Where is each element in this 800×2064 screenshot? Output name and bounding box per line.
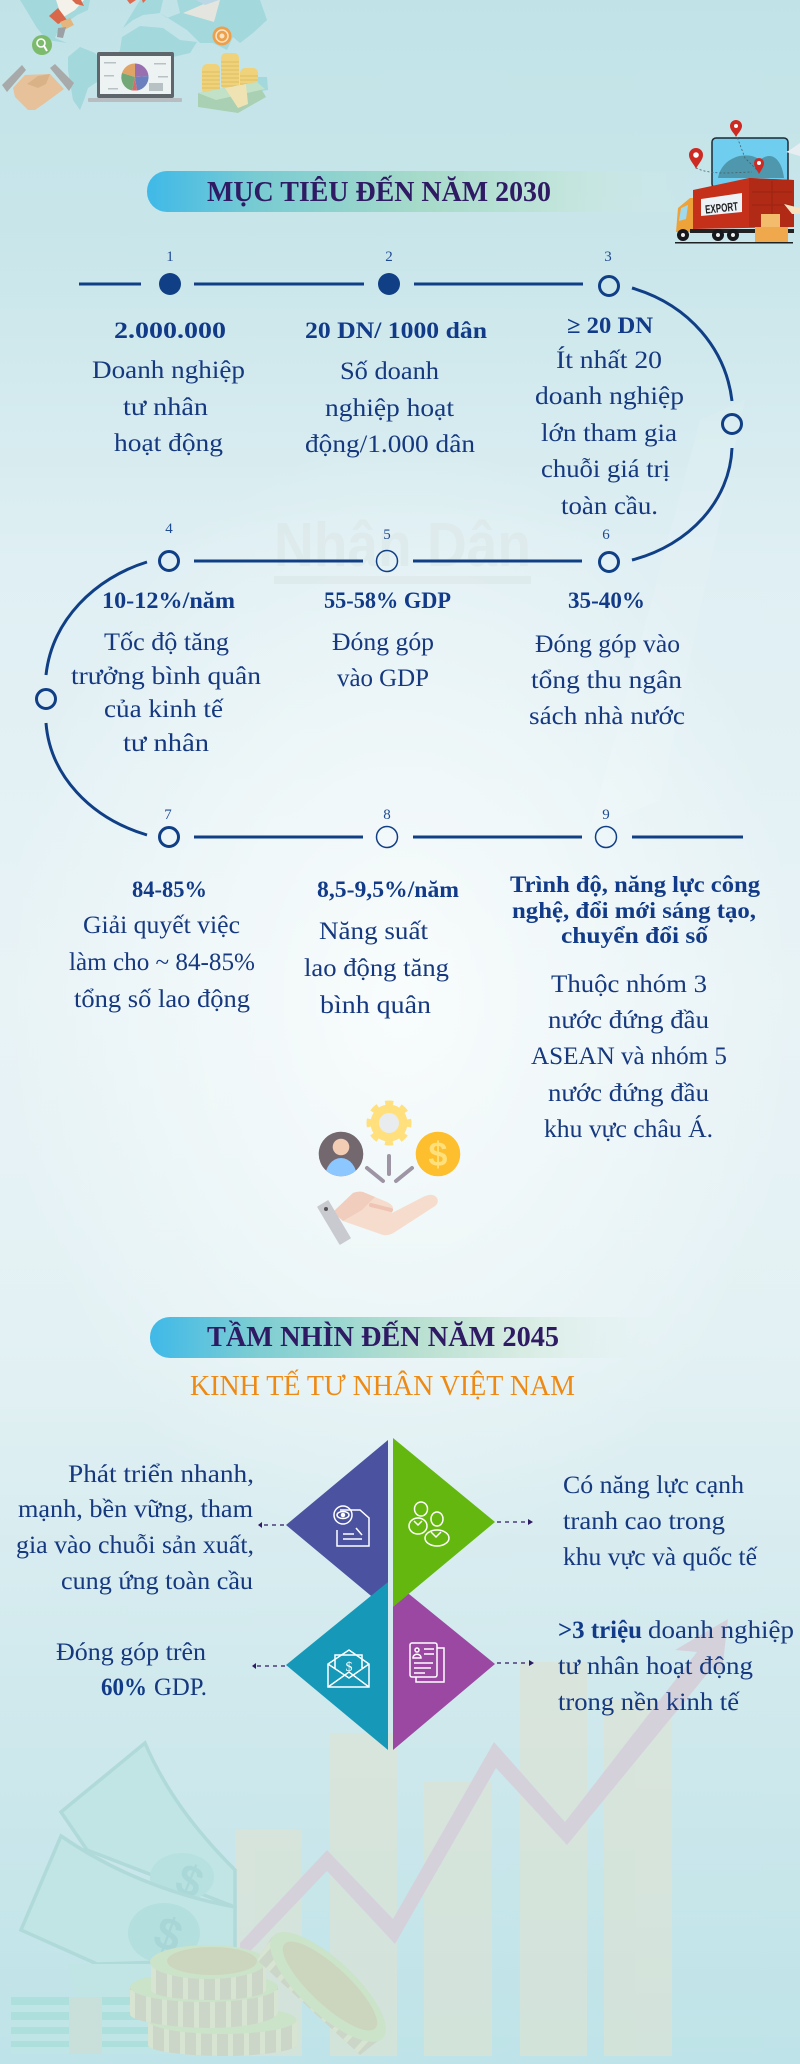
step numbers: 2 — [385, 249, 393, 265]
vision text: top left: gia vào chuỗi sản xuất, — [16, 1532, 254, 1559]
step 3 text: Ít nhất 20 — [556, 346, 662, 374]
icon: magnifier — [32, 35, 52, 55]
title pill: Mục tiêu đến năm 2030 — [147, 171, 707, 212]
step 6 text: sách nhà nước — [529, 703, 685, 730]
step 4 text: 10-12%/năm — [102, 588, 235, 614]
vision text: top right: Có năng lực cạnh — [563, 1472, 745, 1499]
step 9 text — [510, 872, 760, 1143]
icon: document with eye — [334, 1506, 369, 1546]
step 8 text: lao động tăng — [304, 955, 450, 982]
step 9 text: chuyển đổi số — [561, 923, 708, 949]
vision text: top left — [16, 1461, 254, 1595]
step 7 text — [69, 877, 255, 1013]
icon: laptop with pie chart — [88, 52, 182, 102]
step 9 text: ASEAN và nhóm 5 — [531, 1043, 727, 1070]
icon: envelope with dollar: $ — [346, 1660, 352, 1675]
step 4 text: trưởng bình quân — [71, 663, 262, 690]
decorative chart and money art at the bottom — [11, 1619, 728, 2058]
illustration: export truck — [675, 120, 800, 244]
vision text: bottom right: trong nền kinh tế — [558, 1689, 740, 1716]
step numbers: 6 — [602, 527, 610, 543]
icon: gear — [369, 1103, 409, 1143]
step 7 text: Giải quyết việc — [83, 912, 240, 939]
step numbers: 7 — [164, 807, 172, 823]
vision text: top right: tranh cao trong — [563, 1508, 726, 1535]
banknotes: $ — [169, 1854, 210, 1909]
arrow: to bottom-right item — [497, 1660, 534, 1666]
banknotes — [11, 1743, 235, 2054]
vision text: bottom right: >3 triệu — [558, 1617, 642, 1644]
title pill: Mục tiêu đến năm 2030: MỤC TIÊU ĐẾN NĂM 2030 — [207, 174, 551, 208]
icon: megaphone — [49, 0, 84, 38]
timeline path: steps 1 to 9 — [46, 284, 743, 837]
step 1 text: tư nhân — [123, 394, 209, 421]
step 4 text: Tốc độ tăng — [104, 629, 230, 656]
step 3 text: chuỗi giá trị — [541, 456, 670, 483]
step numbers: 9 — [602, 807, 610, 823]
vision text: top left: Phát triển nhanh, — [68, 1461, 254, 1488]
step numbers: 1 — [166, 249, 174, 265]
icon: dollar coin: $ — [429, 1136, 448, 1174]
icon: envelope — [183, 0, 220, 22]
arrow: to top-left item — [258, 1522, 284, 1528]
step 2 text: Số doanh — [340, 358, 440, 385]
step 5 text: 55-58% GDP — [324, 588, 451, 614]
step 9 text: Trình độ, năng lực công — [510, 872, 760, 898]
icon: handshake — [2, 64, 74, 110]
vision text: top left: mạnh, bền vững, tham — [18, 1496, 254, 1523]
icon: person — [318, 1132, 364, 1176]
step 3 text — [535, 313, 684, 520]
icon: dollar coin — [416, 1132, 460, 1176]
icon: people — [409, 1502, 449, 1546]
step 2 text: nghiệp hoạt — [325, 395, 454, 422]
step 9 text: Thuộc nhóm 3 — [551, 971, 707, 998]
banknotes: $ — [147, 1905, 189, 1963]
vision text: bottom left — [56, 1639, 207, 1701]
icon: rocket fragments — [127, 0, 146, 4]
vision text: bottom right: doanh nghiệp — [648, 1617, 794, 1644]
vision text: bottom left: GDP. — [154, 1674, 207, 1701]
step numbers: 3 — [604, 249, 612, 265]
step numbers: 5 — [383, 527, 391, 543]
step 9 text: nghệ, đổi mới sáng tạo, — [512, 898, 756, 924]
step 8 text: Năng suất — [319, 918, 428, 945]
illustration: export truck: EXPORT — [704, 199, 739, 217]
vision text: bottom left: Đóng góp trên — [56, 1639, 207, 1666]
step 3 text: ≥ 20 DN — [567, 313, 653, 339]
step 7 text: tổng số lao động — [74, 986, 251, 1013]
vision text: top left: cung ứng toàn cầu — [61, 1568, 254, 1595]
step 9 text: nước đứng đầu — [548, 1080, 710, 1107]
step 1 text: Doanh nghiệp — [92, 357, 245, 384]
vision text: bottom right: tư nhân hoạt động — [558, 1653, 754, 1680]
step 5 text: Đóng góp — [332, 629, 434, 656]
section title pill: Tầm nhìn đến năm 2045: TẦM NHÌN ĐẾN NĂM 2045 — [207, 1319, 559, 1353]
step 1 text — [92, 318, 245, 457]
vision text: top right: khu vực và quốc tế — [563, 1544, 758, 1571]
step 5 text: vào GDP — [337, 665, 429, 692]
coin stack — [130, 1932, 386, 2056]
step 5 text — [324, 588, 451, 692]
step 8 text — [304, 877, 459, 1019]
timeline nodes — [36, 273, 742, 848]
zigzag arrow — [240, 1619, 728, 1962]
step numbers: 8 — [383, 807, 391, 823]
step 7 text: 84-85% — [132, 877, 207, 903]
bars — [235, 1662, 672, 2056]
step 7 text: làm cho ~ 84-85% — [69, 949, 255, 976]
step 9 text: nước đứng đầu — [548, 1007, 710, 1034]
step 4 text: tư nhân — [123, 730, 210, 757]
step 9 text: khu vực châu Á. — [544, 1115, 713, 1143]
step numbers: 4 — [165, 521, 173, 537]
step 3 text: doanh nghiệp — [535, 383, 684, 410]
step 2 text: động/1.000 dân — [305, 431, 476, 458]
step 6 text: 35-40% — [568, 588, 645, 614]
arrow: to bottom-left item — [252, 1663, 285, 1669]
step 6 text — [529, 588, 685, 730]
icon: envelope with dollar — [328, 1650, 369, 1687]
icon: coins and banknotes — [198, 53, 266, 113]
subtitle: KINH TẾ TƯ NHÂN VIỆT NAM — [190, 1368, 575, 1402]
section title pill: Tầm nhìn đến năm 2045 — [150, 1317, 670, 1358]
step 4 text — [71, 588, 262, 757]
step 2 text — [305, 318, 487, 458]
icon: profile document — [410, 1643, 444, 1682]
vision text: bottom right — [558, 1617, 794, 1716]
step 6 text: Đóng góp vào — [535, 631, 680, 658]
illustration: world map with business icons — [2, 0, 268, 113]
step 1 text: hoạt động — [114, 430, 224, 457]
step 2 text: 20 DN/ 1000 dân — [305, 318, 487, 344]
step 4 text: của kinh tế — [104, 696, 224, 723]
diamond diagram — [286, 1438, 495, 1750]
step 3 text: lớn tham gia — [541, 420, 677, 447]
step 8 text: bình quân — [320, 992, 432, 1019]
vision text: bottom left: 60% — [101, 1674, 147, 1701]
icon: target — [212, 26, 232, 46]
step 6 text: tổng thu ngân — [531, 667, 683, 694]
step 8 text: 8,5-9,5%/năm — [317, 877, 459, 903]
step 3 text: toàn cầu. — [561, 493, 658, 520]
icon: open hand — [318, 1192, 438, 1244]
icon: hand with person, gear and coin — [318, 1103, 460, 1244]
step 1 text: 2.000.000 — [114, 318, 226, 344]
vision text: top right — [563, 1472, 758, 1571]
watermark: Nhân Dân: Nhân Dân — [274, 511, 531, 580]
arrow: to top-right item — [497, 1519, 533, 1525]
step numbers — [164, 249, 612, 823]
